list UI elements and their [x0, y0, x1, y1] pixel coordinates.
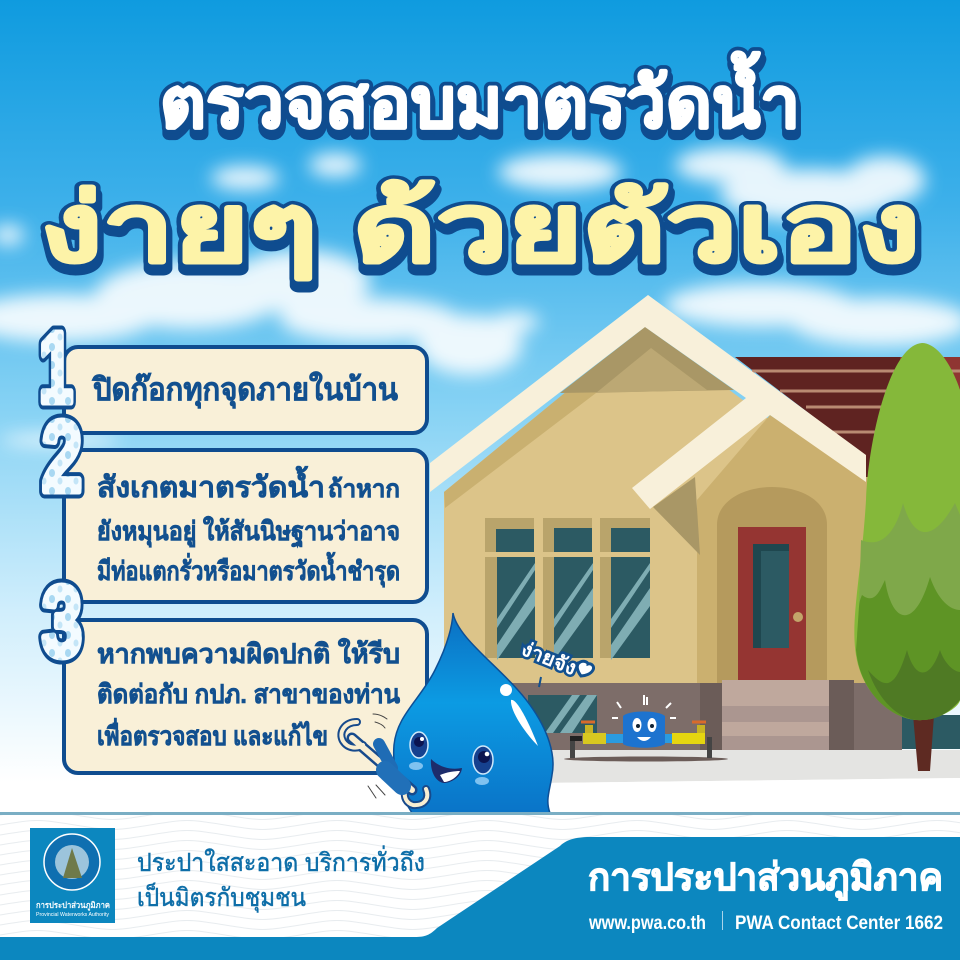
- title line 1: ตรวจสอบมาตรวัดน้ำ: [160, 51, 800, 142]
- contact line: www.pwa.co.th: [588, 913, 706, 934]
- title line 2: [40, 176, 921, 289]
- step 2 panel: มีท่อแตกรั่วหรือมาตรวัดน้ำชำรุด: [97, 551, 400, 588]
- step 3 panel: ติดต่อกับ กปภ. สาขาของท่าน: [97, 679, 400, 709]
- eyes: [410, 732, 493, 774]
- speech: easy: ง่ายจัง: [518, 638, 579, 680]
- logo: Provincial Waterworks Authority: [36, 912, 109, 918]
- title line 1: ตรวจสอบมาตรวัดน้ำ: [161, 57, 801, 148]
- droplet mascot: [341, 613, 553, 813]
- title line 2: ง่ายๆ ด้วยตัวเอง: [40, 176, 920, 282]
- porch steps: [722, 680, 829, 750]
- number 2: 2: [42, 401, 82, 513]
- footer: [0, 812, 960, 960]
- footer wave background: [0, 815, 960, 960]
- meter illustration: [564, 695, 728, 762]
- slogan: เป็นมิตรกับชุมชน: [137, 882, 306, 913]
- number 2: 2: [42, 401, 82, 513]
- white ground strip: [540, 778, 960, 815]
- number 3: 3: [42, 566, 82, 678]
- step 3 panel: หากพบความผิดปกติ ให้รีบ: [97, 638, 400, 669]
- step 1 panel: ปิดก๊อกทุกจุดภายในบ้าน: [92, 371, 398, 409]
- number 1: 1: [39, 312, 73, 424]
- step 2 panel: [64, 450, 427, 602]
- step 1 panel: [64, 347, 427, 433]
- drop body: [394, 613, 553, 813]
- main wall: [444, 327, 850, 683]
- highlight: [500, 684, 538, 746]
- ground: [540, 750, 960, 783]
- front gable wall: [697, 415, 866, 683]
- title line 2: ง่ายๆ ด้วยตัวเอง: [41, 183, 921, 289]
- wall shadow band: [444, 327, 645, 508]
- upper gable: [560, 327, 734, 393]
- logo: [30, 828, 115, 923]
- number 1: 1: [39, 312, 73, 424]
- house: [430, 295, 960, 750]
- porch shadow: [653, 477, 700, 555]
- cheeks: [409, 762, 489, 785]
- step 2 panel: สังเกตมาตรวัดน้ำ: [97, 465, 325, 504]
- number 3: 3: [42, 566, 82, 678]
- number 1: [39, 312, 73, 424]
- mouth: [431, 759, 462, 783]
- slogan: [137, 845, 425, 913]
- title line 1: ตรวจสอบมาตรวัดน้ำ: [160, 51, 800, 142]
- contact line: [588, 911, 943, 934]
- step 2 panel: ถ้าหาก: [328, 476, 400, 503]
- windows: [485, 518, 650, 660]
- organisation name: การประปาส่วนภูมิภาค: [588, 857, 943, 901]
- blue band: [0, 837, 960, 960]
- title line 2: ง่ายๆ ด้วยตัวเอง: [40, 176, 920, 282]
- door: [738, 527, 806, 680]
- speech: easy: [518, 638, 594, 687]
- door arch: [717, 487, 827, 683]
- foundation: [444, 680, 960, 750]
- basement window: [528, 695, 597, 733]
- step 3 panel: [64, 620, 427, 773]
- clouds: [0, 147, 960, 446]
- back roof: [735, 357, 960, 527]
- step 3 panel: เพื่อตรวจสอบ และแก้ไข: [97, 717, 328, 751]
- tree: [854, 343, 960, 771]
- right side wall: [850, 477, 920, 683]
- logo: การประปาส่วนภูมิภาค: [36, 900, 110, 911]
- slogan: ประปาใสสะอาด บริการทั่วถึง: [137, 845, 425, 877]
- roof trim: [430, 295, 866, 509]
- wrench: [341, 714, 427, 805]
- step 2 panel: ยังหมุนอยู่ ให้สันนิษฐานว่าอาจ: [97, 516, 400, 549]
- contact line: PWA Contact Center 1662: [735, 913, 943, 934]
- arm: [379, 744, 402, 786]
